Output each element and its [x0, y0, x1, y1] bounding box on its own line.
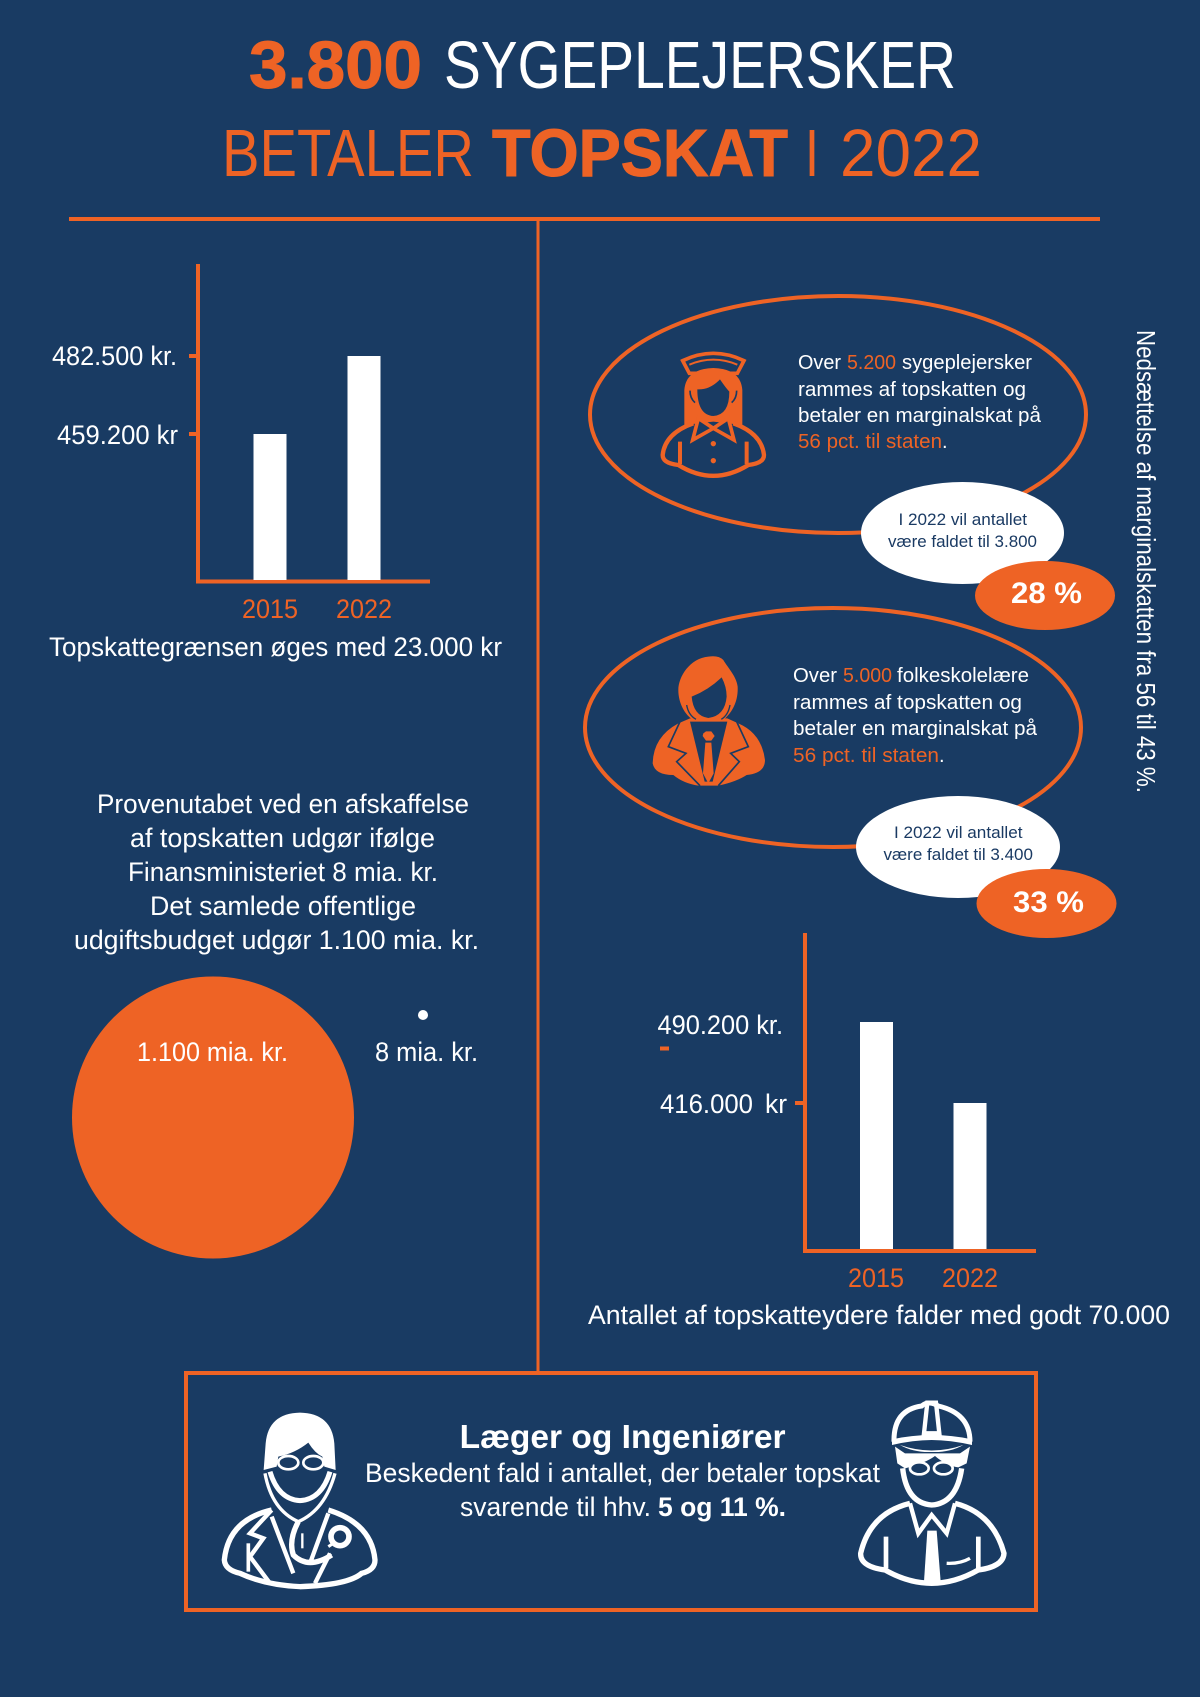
badge: 33 %: [976, 869, 1116, 938]
panel: læger og ingeniører: [186, 1373, 1036, 1610]
text block: provenutab: Finansministeriet 8 mia. kr.: [128, 857, 438, 887]
text: folkeskolelærere: 5.000: [843, 665, 892, 687]
text: sygeplejersker: sygeplejersker: [902, 352, 1032, 374]
icon: nurse: [663, 353, 764, 476]
circle chart: budget comparison: 8 mia. kr.: [375, 1037, 478, 1067]
bar chart: antal topskatteydere: kr: [765, 1089, 787, 1119]
text: sygeplejersker: Over: [798, 352, 841, 374]
bar chart: topskattegrænse: 482.500 kr.: [52, 341, 177, 371]
text block: provenutab: af topskatten udgør ifølge: [130, 823, 435, 853]
text: folkeskolelærere: 56 pct. til staten: [793, 745, 939, 767]
text: sygeplejersker: betaler en marginalskat på: [798, 405, 1042, 427]
panel: sygeplejersker: [590, 296, 1115, 630]
text: sygeplejersker: 56 pct. til staten: [798, 431, 942, 453]
callout: 3.800: være faldet til 3.800: [888, 532, 1037, 551]
text block: provenutab: Provenutabet ved en afskaffelse: [97, 789, 469, 819]
callout: 3.800: [861, 482, 1064, 584]
bar chart: antal topskatteydere: 2022: [942, 1263, 998, 1293]
text block: provenutab: Det samlede offentlige: [150, 891, 416, 921]
text: folkeskolelærere: .: [939, 745, 945, 767]
badge: 28 %: 28 %: [1011, 577, 1082, 610]
text: folkeskolelærere: [793, 665, 1038, 767]
title: SYGEPLEJERSKER: [444, 28, 956, 103]
vertical side note: Nedsættelse af marginalskatten fra 56 til 43 %.: [1131, 330, 1161, 793]
panel heading: Læger og Ingeniører: [460, 1418, 786, 1455]
text: folkeskolelærere: folkeskolelære: [897, 665, 1029, 687]
text: folkeskolelærere: betaler en marginalskat på: [793, 718, 1038, 740]
text: sygeplejersker: .: [942, 431, 948, 453]
icon: teacher: [653, 656, 765, 786]
text: folkeskolelærere: rammes af topskatten og: [793, 692, 1022, 714]
callout: 3.800: I 2022 vil antallet: [898, 510, 1027, 529]
bar chart: antal topskatteydere: 490.200 kr.: [658, 1010, 783, 1040]
circle chart: budget comparison: 1.100 mia. kr.: [137, 1037, 288, 1067]
bar chart: antal topskatteydere: 2015: [848, 1263, 904, 1293]
text block: provenutab: [74, 789, 479, 955]
bar chart: topskattegrænse: 459.200 kr: [57, 420, 178, 450]
title: I: [805, 116, 819, 191]
text: sygeplejersker: [798, 352, 1042, 453]
text block: provenutab: udgiftsbudget udgør 1.100 mia. kr.: [74, 925, 479, 955]
bar chart: topskattegrænse: 2022: [336, 594, 392, 624]
callout: 3.400: være faldet til 3.400: [884, 845, 1033, 864]
title: TOPSKAT: [492, 116, 788, 191]
panel text: [365, 1458, 880, 1522]
title: [222, 28, 982, 191]
icon: engineer: [861, 1403, 1004, 1583]
callout: 3.400: [856, 796, 1060, 898]
callout: 3.400: I 2022 vil antallet: [894, 823, 1023, 842]
panel text: svarende til hhv.: [460, 1492, 651, 1522]
title: 3.800: [249, 28, 422, 103]
title: 2022: [840, 116, 982, 191]
chart caption: topskattegrænse: Topskattegrænsen øges med 23.000 kr: [49, 632, 502, 662]
panel text: Beskedent fald i antallet, der betaler topskat: [365, 1458, 880, 1488]
chart caption: antal topskatteydere: Antallet af topskatteydere falder med godt 70.000: [588, 1300, 1170, 1330]
badge: 28 %: [975, 561, 1115, 630]
circle chart: budget comparison: [72, 976, 478, 1258]
panel text: 5 og 11 %.: [658, 1492, 786, 1522]
bar chart: topskattegrænse: 2015: [242, 594, 298, 624]
bar chart: antal topskatteydere: [658, 933, 1036, 1293]
text: folkeskolelærere: Over: [793, 665, 837, 687]
icon: doctor: [224, 1413, 375, 1587]
panel: folkeskolelærere: [585, 608, 1116, 938]
text: sygeplejersker: 5.200: [847, 352, 896, 374]
bar chart: topskattegrænse: [52, 264, 430, 624]
bar chart: antal topskatteydere: 416.000: [660, 1089, 753, 1119]
badge: 33 %: 33 %: [1013, 886, 1084, 919]
title: BETALER: [222, 116, 474, 191]
text: sygeplejersker: rammes af topskatten og: [798, 379, 1026, 401]
